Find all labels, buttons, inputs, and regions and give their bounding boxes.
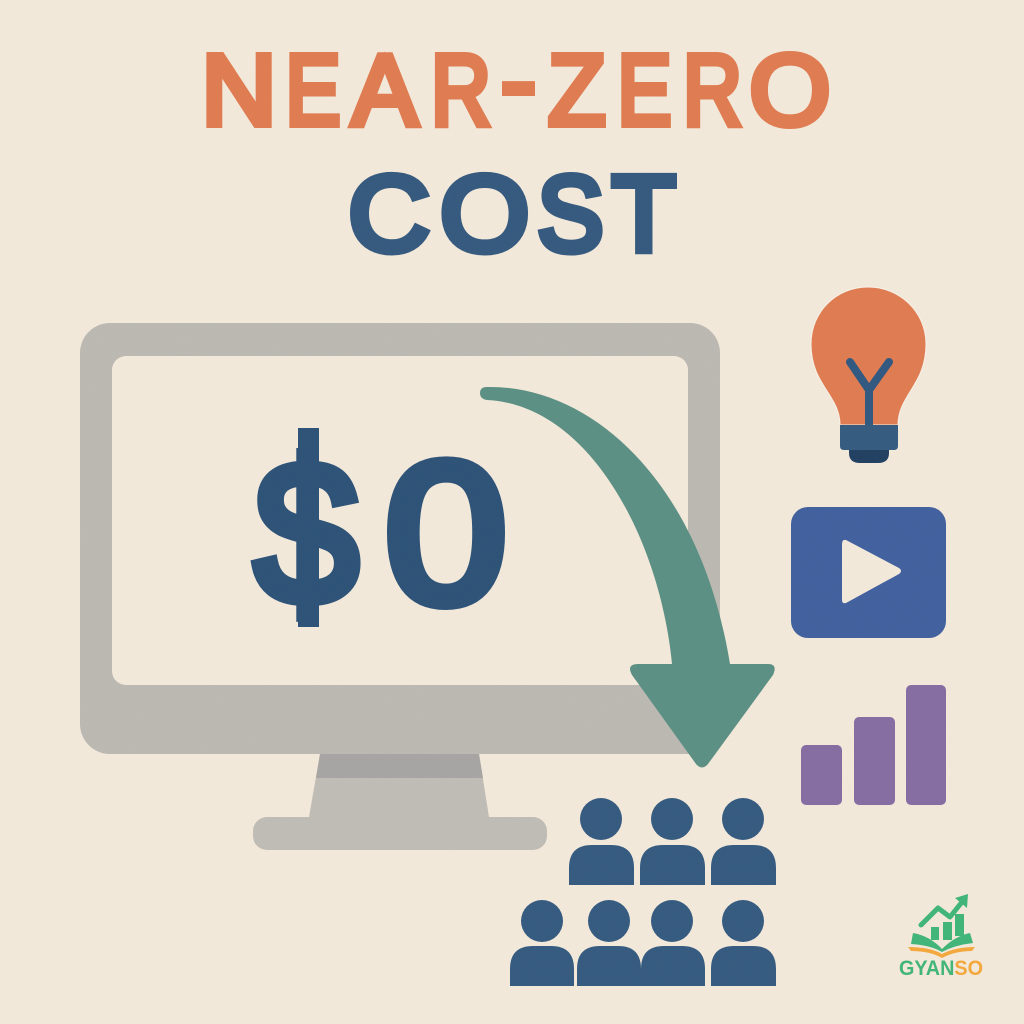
logo wordmark: GYANSO xyxy=(899,957,983,980)
icon: light bulb xyxy=(811,287,926,463)
screen price: $0: $ xyxy=(255,422,358,645)
title: NEAR-ZERO: - xyxy=(501,25,536,137)
logo growth arrow xyxy=(921,902,962,925)
logo book cover xyxy=(908,947,975,958)
monitor stand xyxy=(309,754,489,817)
title: NEAR-ZERO: E xyxy=(286,34,340,146)
subtitle: COST: O xyxy=(440,154,529,274)
subtitle: COST: C xyxy=(348,154,430,274)
icon: computer monitor xyxy=(80,323,720,850)
title: NEAR-ZERO: E xyxy=(618,34,672,146)
screen price: $0: 0 xyxy=(385,422,507,645)
title: NEAR-ZERO: R xyxy=(431,34,491,146)
subtitle: COST xyxy=(348,154,676,274)
filament xyxy=(850,362,889,426)
logo: GYANSO xyxy=(899,894,983,980)
title: NEAR-ZERO: Z xyxy=(548,34,606,146)
bulb base xyxy=(840,425,898,450)
title: NEAR-ZERO xyxy=(202,25,830,146)
bulb glass xyxy=(811,287,926,425)
title: NEAR-ZERO: R xyxy=(683,34,742,146)
stand shadow xyxy=(316,754,483,778)
bulb tip xyxy=(849,450,889,463)
title: NEAR-ZERO: A xyxy=(352,34,418,146)
screen price: $0 xyxy=(255,422,507,645)
logo book xyxy=(911,933,973,952)
icon: audience of people xyxy=(510,798,776,986)
monitor frame xyxy=(80,323,720,754)
title: NEAR-ZERO: N xyxy=(202,34,276,146)
arrow: curved teal arrow xyxy=(480,387,775,768)
bar chart icon xyxy=(801,685,946,805)
video panel xyxy=(791,507,946,638)
monitor screen xyxy=(112,356,688,685)
title: NEAR-ZERO: O xyxy=(750,34,830,146)
subtitle: COST: T xyxy=(612,154,676,274)
logo bars xyxy=(931,914,964,940)
play triangle xyxy=(842,540,901,603)
person row 1 xyxy=(569,798,776,885)
person row 2 xyxy=(510,900,776,986)
monitor base xyxy=(253,817,547,850)
logo arrow head xyxy=(955,894,968,908)
subtitle: COST: S xyxy=(538,154,604,274)
icon: video play button xyxy=(791,507,946,638)
